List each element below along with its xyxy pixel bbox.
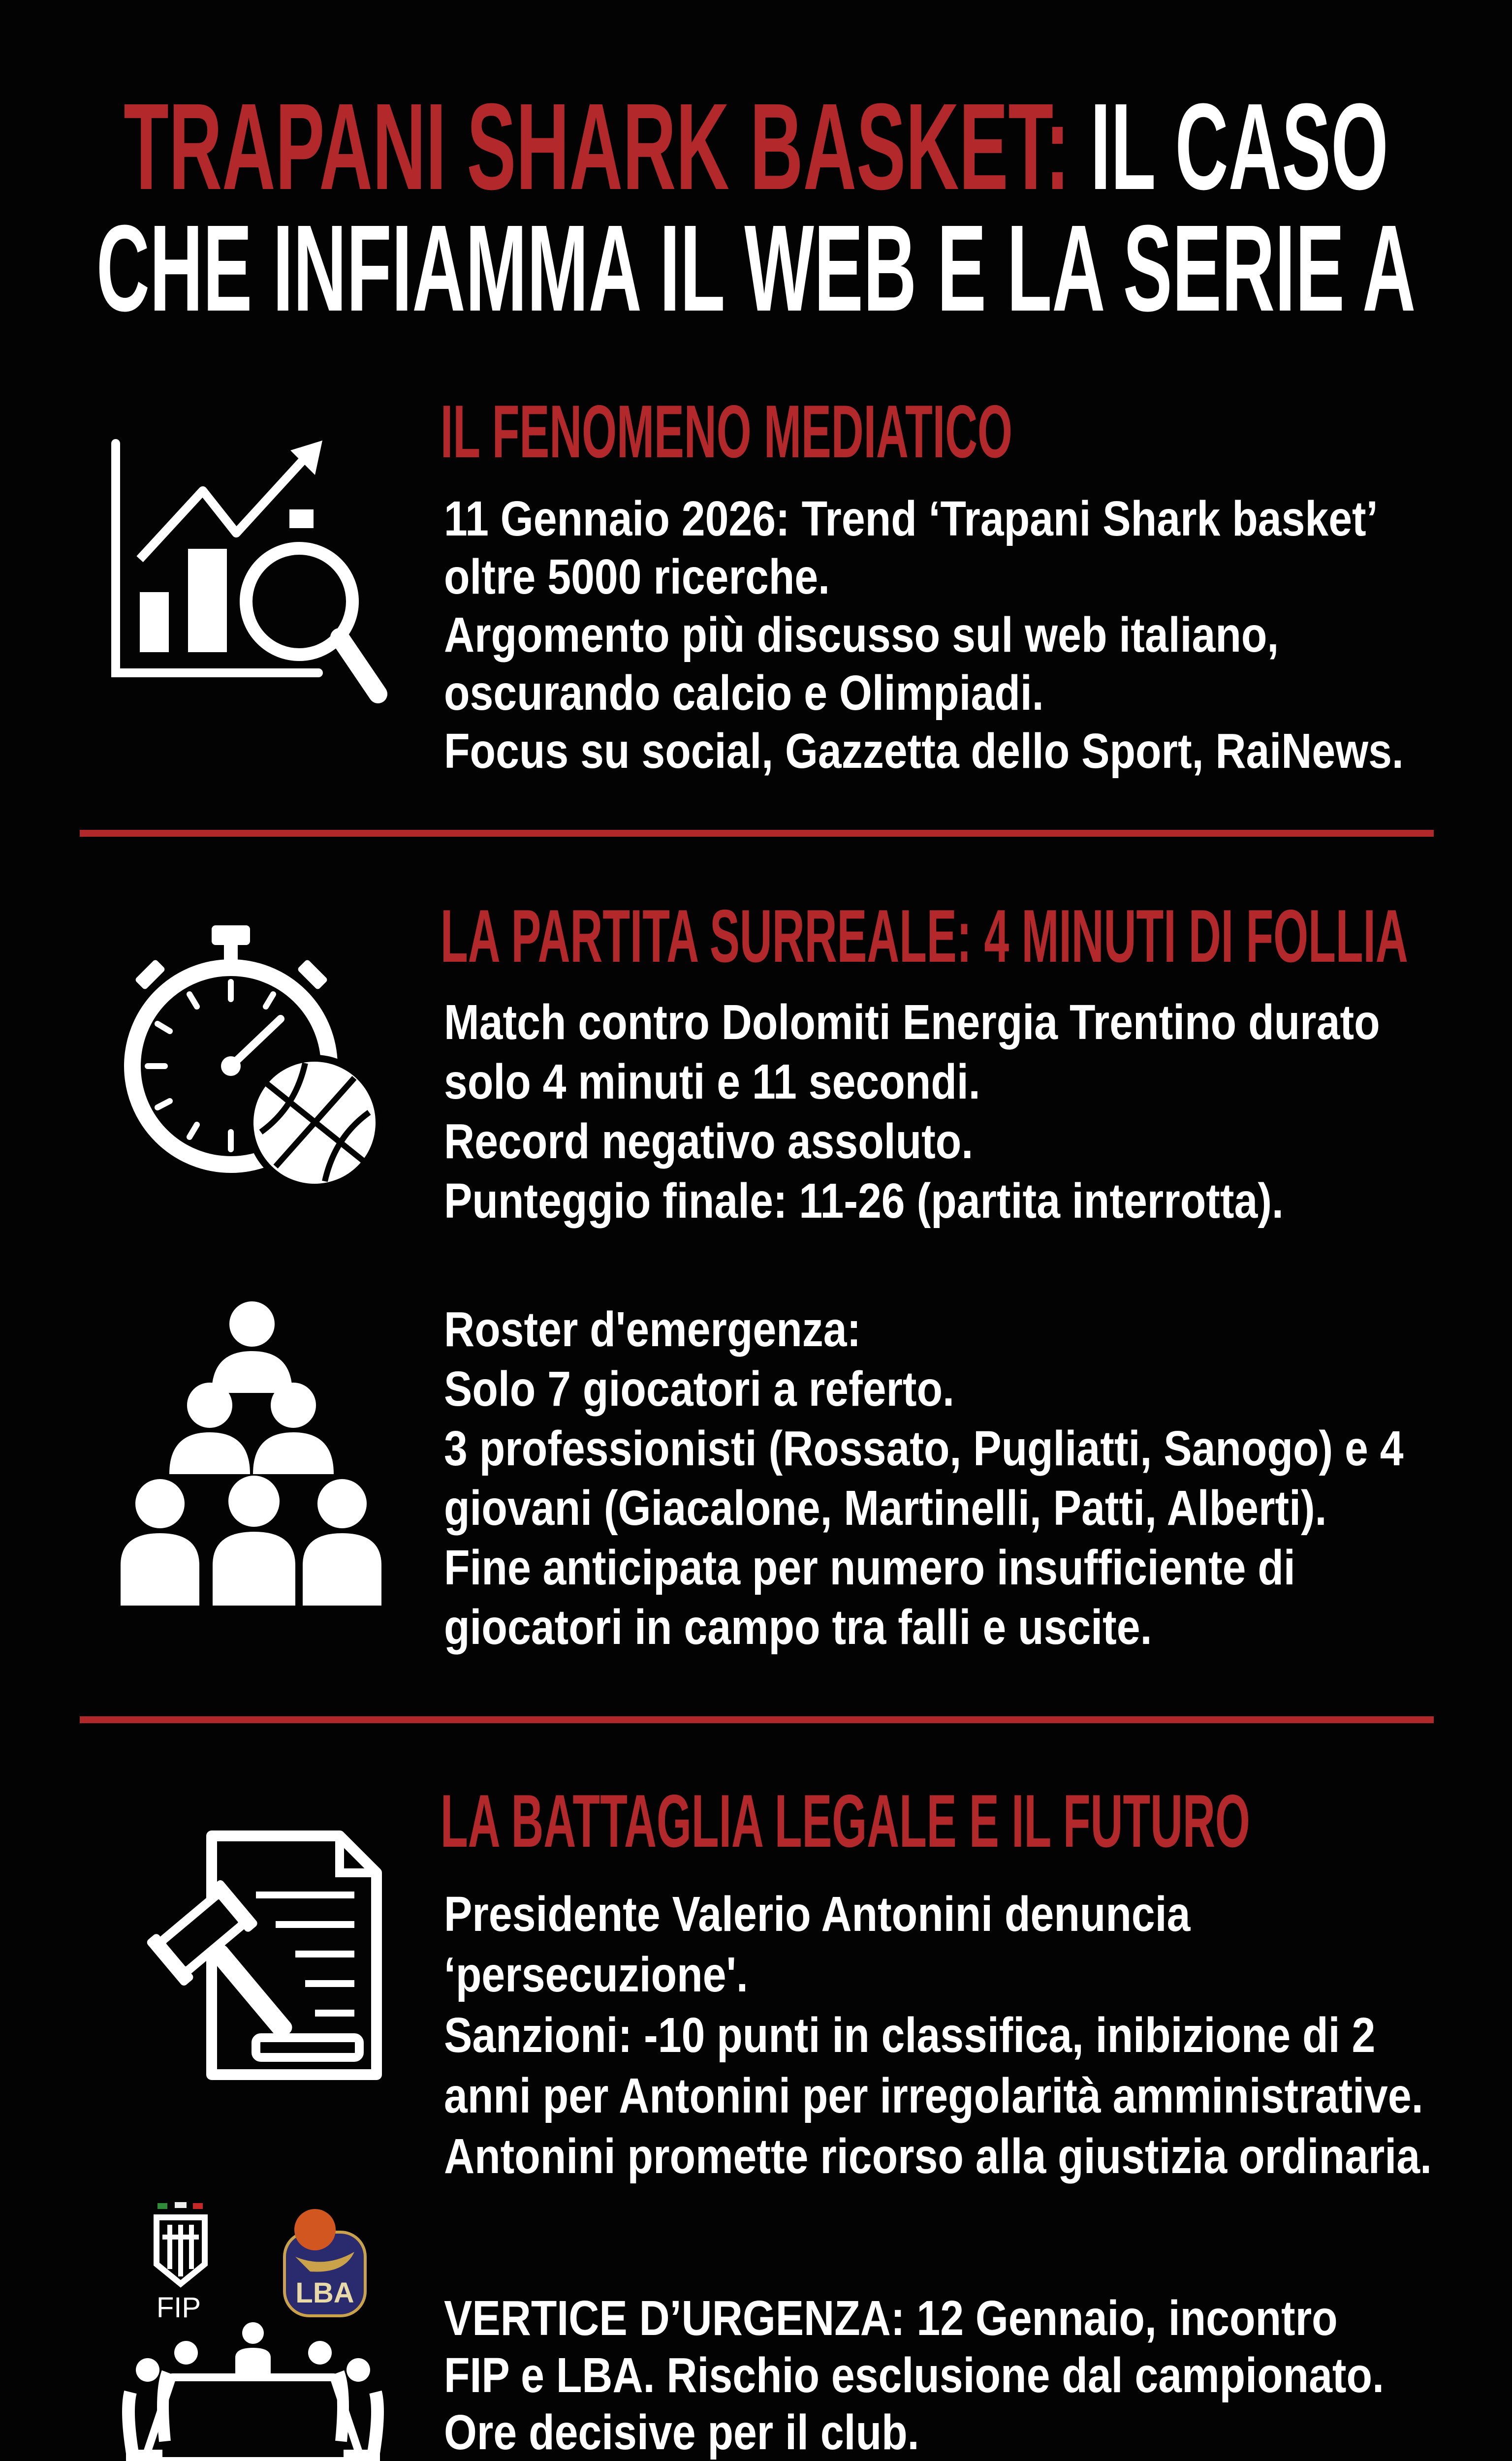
text: fenomeno mediatico: Argomento più discusso sul web italiano, [444,607,1279,663]
text: partita: Match contro Dolomiti Energia Trentino durato [444,995,1380,1050]
text: battaglia legale: anni per Antonini per irregolarità amministrative. [444,2068,1423,2123]
text: fenomeno mediatico: Focus su social, Gazzetta dello Sport, RaiNews. [444,724,1404,779]
text: vertice: FIP e LBA. Rischio esclusione dal campionato. [444,2348,1384,2403]
title: TRAPANI SHARK BASKET: IL CASO [124,78,1388,215]
text: vertice [444,2291,1384,2460]
title: CHE INFIAMMA IL WEB E LA SERIE A [96,199,1416,337]
title [96,78,1416,337]
text: vertice: Ore decisive per il club. [444,2405,919,2460]
icon: team pyramid [121,1301,381,1606]
icon: LBA logo: LBA [295,2277,354,2309]
icon: LBA logo [284,2209,365,2316]
icon: FIP logo: FIP [157,2292,201,2324]
text: fenomeno mediatico: oscurando calcio e Olimpiadi. [444,665,1044,721]
heading: il fenomeno mediatico: IL FENOMENO MEDIATICO [441,390,1012,473]
text: fenomeno mediatico [444,491,1404,779]
text: battaglia legale [444,1887,1432,2184]
text: roster: 3 professionisti (Rossato, Pugliatti, Sanogo) e 4 [444,1421,1404,1476]
heading: battaglia legale: LA BATTAGLIA LEGALE E IL FUTURO [441,1779,1250,1863]
icon: stopwatch with basketball [132,925,382,1191]
text: partita: solo 4 minuti e 11 secondi. [444,1054,980,1109]
text: partita: Punteggio finale: 11-26 (partita interrotta). [444,1173,1284,1229]
text: roster: Solo 7 giocatori a referto. [444,1361,954,1417]
text: vertice: VERTICE D’URGENZA: 12 Gennaio, incontro [444,2291,1338,2346]
text: battaglia legale: Antonini promette ricorso alla giustizia ordinaria. [444,2129,1432,2184]
text: battaglia legale: Sanzioni: -10 punti in classifica, inibizione di 2 [444,2008,1375,2063]
text: partita [444,995,1380,1229]
icon: chart with magnifier [116,441,378,694]
icon: meeting table [128,2322,378,2461]
text: roster: giocatori in campo tra falli e uscite. [444,1600,1152,1655]
text: battaglia legale: Presidente Valerio Antonini denuncia [444,1887,1190,1942]
icon: FIP logo [157,2202,205,2324]
heading: la partita surreale: LA PARTITA SURREALE: 4 MINUTI DI FOLLIA [441,894,1408,978]
text: roster [444,1302,1404,1655]
text: battaglia legale: ‘persecuzione'. [444,1947,748,2002]
text: fenomeno mediatico: oltre 5000 ricerche. [444,549,830,604]
icon: gavel and document [146,1836,377,2075]
text: roster: giovani (Giacalone, Martinelli, Patti, Alberti). [444,1481,1327,1536]
text: roster: Roster d'emergenza: [444,1302,861,1357]
text: fenomeno mediatico: 11 Gennaio 2026: Trend ‘Trapani Shark basket’ [444,491,1378,546]
text: partita: Record negativo assoluto. [444,1114,973,1169]
text: roster: Fine anticipata per numero insufficiente di [444,1540,1295,1595]
